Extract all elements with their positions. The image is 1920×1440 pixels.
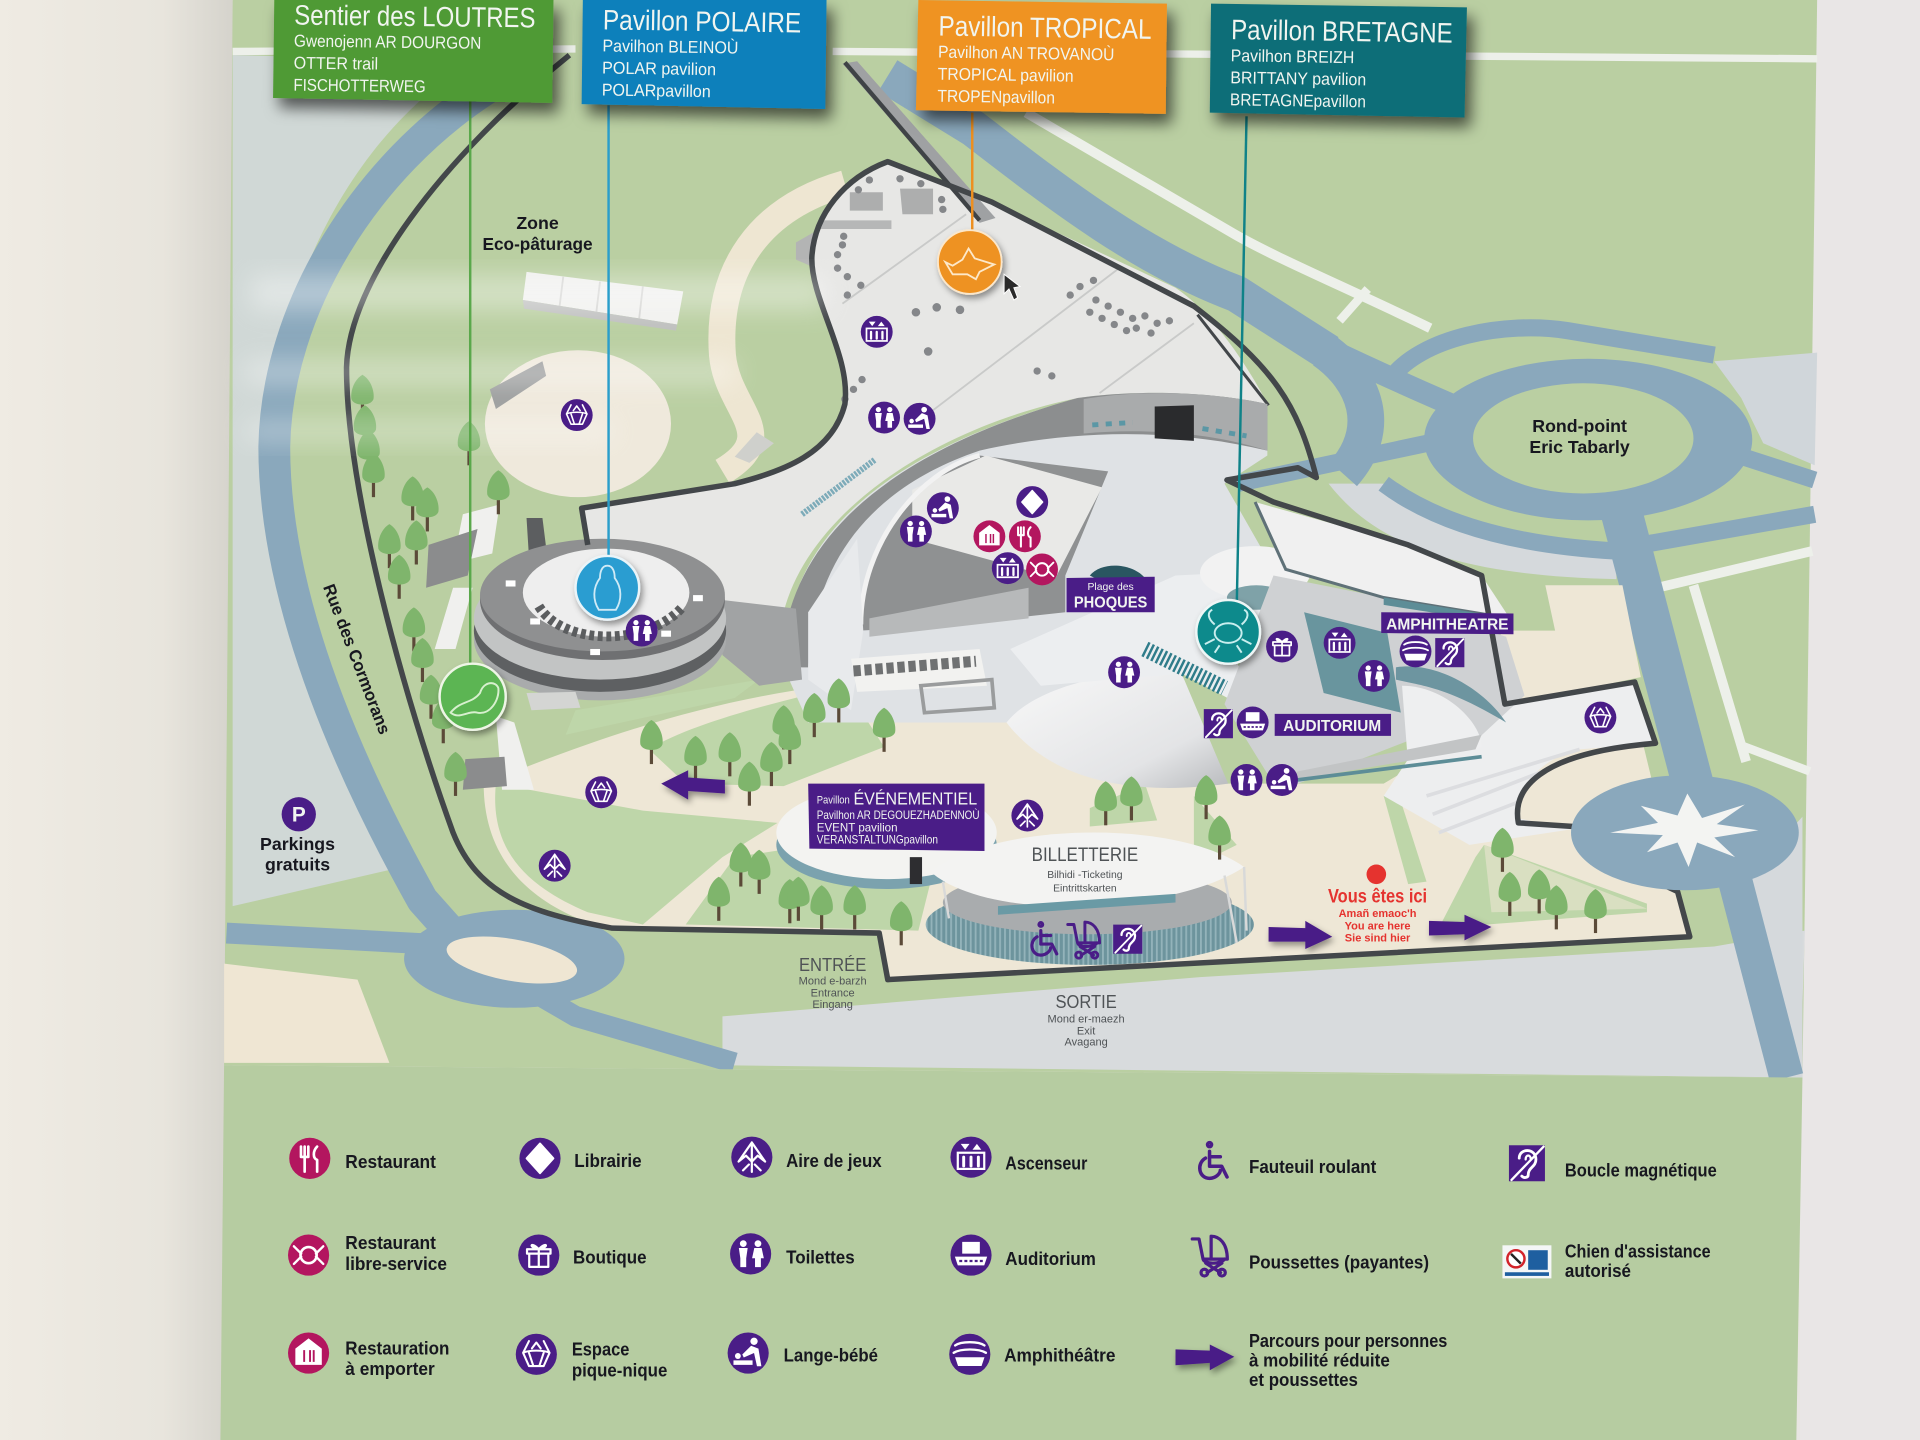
arrow: west route xyxy=(661,770,725,800)
bretagne pavilion xyxy=(1224,502,1524,784)
text: ticketing: Bilhidi -Ticketing xyxy=(1047,870,1123,881)
icon: playground west xyxy=(539,850,571,882)
legend: toilets: Toilettes xyxy=(786,1247,855,1268)
legend: bookshop xyxy=(519,1138,642,1179)
label: event pavilion xyxy=(808,784,984,851)
legend: hearing loop: Boucle magnétique xyxy=(1565,1160,1717,1181)
pin lines xyxy=(470,100,1247,673)
icon: gift shop xyxy=(1266,631,1298,662)
icon: toilets north xyxy=(868,402,900,433)
green lawn path beige overlay xyxy=(1484,845,1647,912)
legend: toilets xyxy=(730,1233,855,1274)
text: entrance: Eingang xyxy=(812,999,853,1011)
you are here: You are here xyxy=(1345,920,1411,932)
label: amphitheatre: AMPHITHEATRE xyxy=(1386,616,1509,633)
icon: baby north xyxy=(904,403,936,435)
legend: accessible route: Parcours pour personnes xyxy=(1249,1330,1447,1351)
legend: accessible route: et poussettes xyxy=(1249,1369,1358,1390)
pin: crab xyxy=(1196,600,1260,664)
legend: takeaway xyxy=(288,1332,449,1379)
rooftop dome xyxy=(1200,546,1310,610)
legend: gift shop: Boutique xyxy=(573,1247,647,1268)
icon: playground centre xyxy=(1011,800,1043,831)
icon: wheelchair ticketing xyxy=(1032,923,1057,955)
callout: Pavillon Polaire: POLAR pavilion xyxy=(602,57,716,79)
text: exit: Mond er-maezh xyxy=(1048,1013,1125,1025)
callout: Pavillon Tropical: Pavillon TROPICAL xyxy=(938,11,1152,45)
callout: Sentier des Loutres: Gwenojenn AR DOURGON xyxy=(294,31,481,53)
label: auditorium xyxy=(1275,714,1391,736)
label: event pavilion: Pavilhon AR DEGOUEZHADENNOÙ xyxy=(817,809,980,822)
wedge walkway xyxy=(842,61,996,223)
star roundabout xyxy=(1571,775,1799,890)
reflection haze xyxy=(245,276,827,440)
legend: assistance dog: Chien d'assistance xyxy=(1565,1241,1711,1262)
legend: lift: Ascenseur xyxy=(1005,1152,1087,1173)
callout: Pavillon Polaire: Pavilhon BLEINOÙ xyxy=(602,35,739,58)
south-west parcel xyxy=(224,964,389,1063)
east grey areas xyxy=(1329,353,1817,1078)
icon: picnic ecopasture xyxy=(561,399,593,431)
icon: loop auditorium xyxy=(1204,709,1233,738)
text: roundabout xyxy=(1529,416,1630,457)
arrow: south route xyxy=(1269,921,1332,949)
beige east plot xyxy=(1500,585,1641,704)
label: auditorium: AUDITORIUM xyxy=(1283,718,1381,735)
text: ticketing: BILLETTERIE xyxy=(1032,845,1138,866)
fan stairs xyxy=(1384,682,1656,845)
icon: toilets dome xyxy=(1108,656,1140,688)
you are here xyxy=(1328,864,1427,945)
legend: picnic xyxy=(516,1334,667,1380)
label: plage des phoques: Plage des xyxy=(1088,582,1134,593)
text: ticketing: Eintrittskarten xyxy=(1053,883,1117,894)
icon: toilets south xyxy=(1231,764,1262,796)
text: entrance: ENTRÉE xyxy=(799,954,866,975)
label: plage des phoques xyxy=(1067,577,1155,612)
park map xyxy=(224,0,1817,1078)
callout: Sentier des Loutres: OTTER trail xyxy=(294,53,378,74)
callout: Pavillon Bretagne xyxy=(1210,4,1467,118)
site beige ground xyxy=(484,678,1690,980)
parking: gratuits xyxy=(265,855,330,875)
label: event pavilion: ÉVÉNEMENTIEL xyxy=(853,788,977,808)
legend: restaurant xyxy=(289,1138,436,1179)
legend: amphitheatre: Amphithéâtre xyxy=(1004,1345,1116,1366)
you are here: Sie sind hier xyxy=(1345,933,1411,945)
legend: assistance dog xyxy=(1502,1241,1711,1281)
callout: Pavillon Polaire: Pavillon POLAIRE xyxy=(603,4,801,39)
icon: toilets polar xyxy=(626,615,658,647)
icon: self service xyxy=(1026,553,1058,585)
trees xyxy=(351,375,1607,945)
legend: wheelchair xyxy=(1200,1143,1376,1178)
callout: Pavillon Polaire: POLARpavillon xyxy=(602,80,711,101)
billetterie building xyxy=(926,833,1254,965)
you are here: Vous êtes ici xyxy=(1328,886,1427,907)
tropical pavilion roof xyxy=(582,162,1269,612)
text: eco-pasture zone: Eco-pâturage xyxy=(482,234,593,254)
text: roundabout: Eric Tabarly xyxy=(1529,437,1630,457)
callout: Sentier des Loutres: Sentier des LOUTRES xyxy=(294,0,536,33)
text: exit xyxy=(1048,991,1125,1049)
legend: hearing loop xyxy=(1509,1145,1717,1181)
callout: Pavillon Tropical xyxy=(916,0,1167,114)
callout: Pavillon Tropical: TROPENpavillon xyxy=(937,86,1055,107)
legend: wheelchair: Fauteuil roulant xyxy=(1249,1156,1376,1177)
legend: baby changing: Lange-bébé xyxy=(784,1345,878,1366)
icon: lift brittany xyxy=(1324,627,1356,659)
legend: bookshop: Librairie xyxy=(574,1150,642,1171)
parking xyxy=(260,797,335,875)
text: entrance: Entrance xyxy=(811,988,855,1000)
legend: baby changing xyxy=(728,1332,878,1374)
callout: Pavillon Bretagne: BRITTANY pavilion xyxy=(1230,67,1366,89)
legend background xyxy=(220,1065,1802,1440)
legend: gift shop xyxy=(518,1235,647,1276)
text: eco-pasture zone xyxy=(482,213,593,254)
icon: auditorium xyxy=(1237,707,1269,738)
legend: assistance dog: autorisé xyxy=(1565,1260,1631,1281)
text: eco-pasture zone: Zone xyxy=(516,213,559,233)
icon: toilets centre xyxy=(900,515,932,547)
left grey surroundings xyxy=(233,55,471,906)
parking: P xyxy=(292,804,306,827)
icon: amphitheatre xyxy=(1400,635,1431,667)
legend: self service: libre-service xyxy=(345,1253,447,1274)
legend: accessible route xyxy=(1176,1330,1447,1390)
pier stairs xyxy=(527,692,580,710)
text: exit: Avagang xyxy=(1064,1037,1108,1049)
icon: loop ticketing xyxy=(1113,925,1142,954)
legend: picnic: pique-nique xyxy=(572,1359,667,1380)
icon: picnic west xyxy=(585,776,617,808)
callout: Pavillon Bretagne: BRETAGNEpavillon xyxy=(1230,89,1366,111)
icon: baby centre xyxy=(927,492,959,524)
label: event pavilion: Pavillon xyxy=(817,794,850,806)
polar pavilion xyxy=(474,539,802,700)
text: entrance xyxy=(799,954,867,1011)
mouse cursor xyxy=(1004,274,1020,300)
legend panel xyxy=(220,1065,1802,1440)
pin: otter xyxy=(440,664,506,730)
text: ticketing xyxy=(1032,845,1138,894)
callout: Sentier des Loutres xyxy=(273,0,553,103)
map icons xyxy=(539,316,1616,958)
text: exit: SORTIE xyxy=(1056,991,1117,1012)
stair hatch xyxy=(1145,649,1224,688)
text: roundabout: Rond-point xyxy=(1532,416,1627,436)
west service buildings xyxy=(426,504,547,790)
legend: auditorium: Auditorium xyxy=(1005,1248,1096,1269)
legend: accessible route: à mobilité réduite xyxy=(1249,1350,1390,1371)
label: event pavilion: VERANSTALTUNGpavillon xyxy=(817,834,938,847)
legend: auditorium xyxy=(950,1235,1096,1276)
south-west road verge xyxy=(392,980,735,1063)
callout: Sentier des Loutres: FISCHOTTERWEG xyxy=(293,75,426,96)
left green verge xyxy=(276,55,576,882)
text: road name: Rue des Cormorans xyxy=(319,581,395,737)
label: event pavilion: EVENT pavilion xyxy=(817,821,898,834)
icon: lift north xyxy=(861,316,893,348)
event pavilion xyxy=(776,786,997,889)
site boundary xyxy=(347,55,1690,980)
legend: amphitheatre xyxy=(949,1334,1116,1375)
callout: Pavillon Bretagne: Pavillon BRETAGNE xyxy=(1231,14,1453,49)
text: entrance: Mond e-barzh xyxy=(799,975,867,987)
icon: restaurant xyxy=(1009,520,1041,552)
pin: shark xyxy=(938,230,1002,294)
legend: lift xyxy=(950,1137,1087,1178)
callout: Pavillon Bretagne: Pavilhon BREIZH xyxy=(1231,45,1355,67)
legend: picnic: Espace xyxy=(572,1339,629,1360)
callout: Pavillon Tropical: Pavilhon AN TROVANOÙ xyxy=(938,42,1115,64)
auditorium dome xyxy=(1007,672,1228,788)
parking: Parkings xyxy=(260,834,335,854)
central building xyxy=(781,393,1273,722)
eco-pasture ground xyxy=(485,184,845,497)
roof slab xyxy=(1010,569,1304,722)
icon: loop amphitheatre xyxy=(1435,638,1464,667)
map base xyxy=(224,0,1817,1078)
legend: playground: Aire de jeux xyxy=(786,1150,882,1171)
icon: pram ticketing xyxy=(1068,922,1100,958)
callout: Pavillon Polaire xyxy=(582,0,827,109)
legend: playground xyxy=(731,1137,882,1178)
you are here: Amañ emaoc'h xyxy=(1339,908,1417,920)
green lawns xyxy=(495,680,1647,931)
legend: takeaway: Restauration xyxy=(345,1337,449,1358)
legend: self service: Restaurant xyxy=(345,1232,436,1253)
icon: bookshop xyxy=(1016,486,1048,518)
legend: restaurant: Restaurant xyxy=(345,1151,436,1172)
text: exit: Exit xyxy=(1077,1026,1095,1038)
pin: penguin xyxy=(576,556,639,620)
icon: picnic east xyxy=(1584,702,1616,733)
callout: Pavillon Tropical: TROPICAL pavilion xyxy=(938,64,1074,86)
white footpaths xyxy=(233,49,1817,771)
parking grey south xyxy=(722,931,1805,1078)
icon: toilets brittany xyxy=(1358,660,1390,692)
legend: prams xyxy=(1192,1236,1429,1276)
icon: takeaway xyxy=(973,520,1005,552)
icon: baby south xyxy=(1266,764,1298,796)
roads xyxy=(227,76,1815,1078)
legend: prams: Poussettes (payantes) xyxy=(1249,1252,1429,1273)
label: plage des phoques: PHOQUES xyxy=(1074,594,1147,611)
legend: self service xyxy=(288,1232,447,1276)
arrow: south-east route xyxy=(1429,915,1491,940)
legend: takeaway: à emporter xyxy=(345,1358,435,1379)
icon: lift centre xyxy=(992,552,1024,584)
